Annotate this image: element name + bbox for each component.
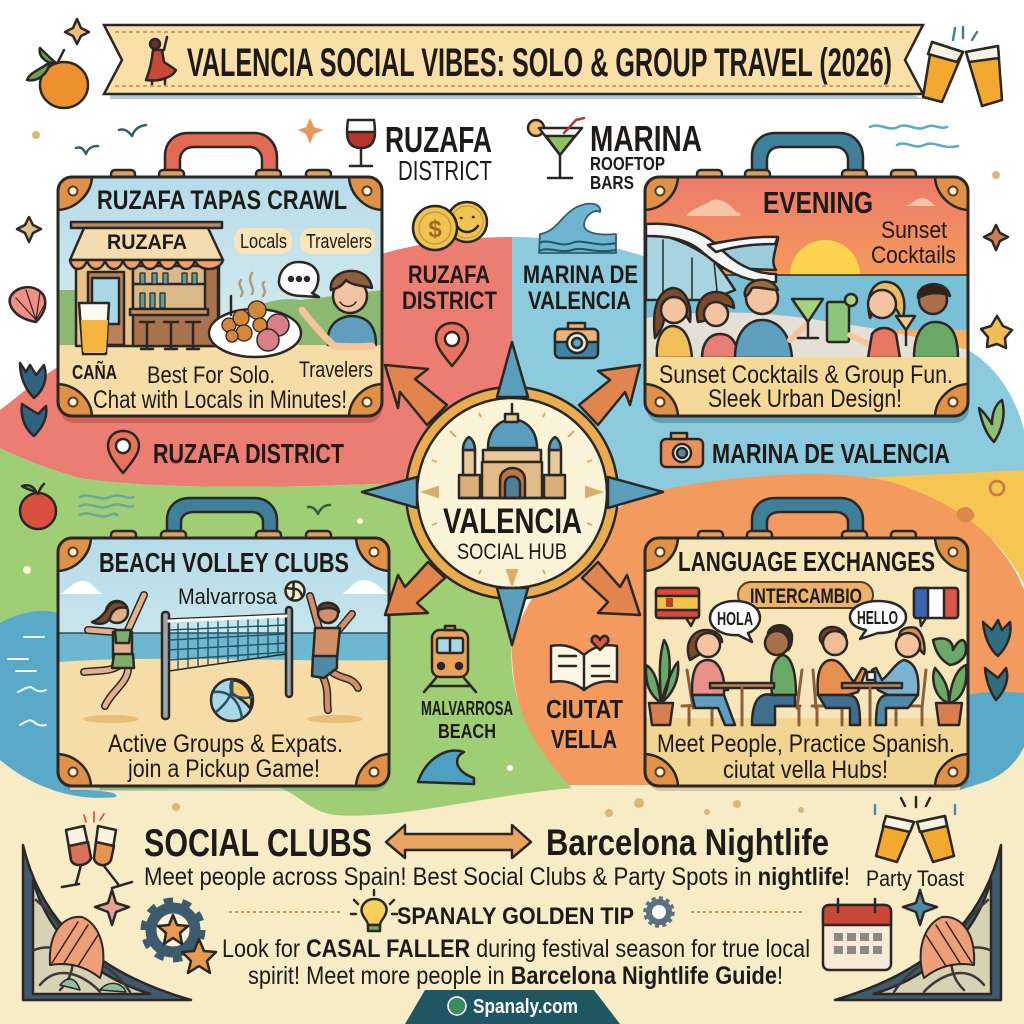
suitcase: Marina evening: Sleek Urban Design! bbox=[708, 385, 902, 413]
heading: golden tip: SPANALY GOLDEN TIP bbox=[397, 903, 634, 930]
suitcase: Ruzafa tapas crawl bbox=[58, 133, 382, 423]
footer badge: Spanaly.com bbox=[473, 996, 578, 1018]
icon: wine glass bbox=[347, 120, 375, 166]
label: Malvarrosa Beach: MALVARROSA bbox=[421, 698, 513, 720]
group of people bbox=[654, 280, 958, 358]
sand strip bbox=[646, 357, 967, 415]
label: Ruzafa District map: RUZAFA bbox=[408, 261, 490, 289]
suitcase: Ruzafa tapas crawl: Chat with Locals in Minutes! bbox=[93, 386, 347, 414]
glass of beer bbox=[79, 303, 109, 354]
handle bbox=[165, 133, 277, 172]
handle bbox=[752, 133, 863, 172]
decorations: birds and waves bbox=[76, 125, 958, 516]
corner ornament right bbox=[835, 845, 1001, 1000]
icon: seashell bbox=[10, 287, 46, 322]
icon: small wave bbox=[418, 750, 474, 784]
suitcase: Beach volley clubs: join a Pickup Game! bbox=[127, 755, 320, 783]
label: Ruzafa top: DISTRICT bbox=[398, 155, 492, 186]
corner brackets bbox=[58, 177, 382, 416]
suitcase: Beach volley clubs bbox=[58, 498, 389, 791]
icon: apple bbox=[20, 484, 56, 529]
suitcase: Ruzafa tapas crawl: Locals bbox=[240, 231, 287, 253]
icon: beer toast bottom bbox=[875, 797, 955, 862]
handle bbox=[752, 498, 863, 534]
label: Ruzafa District map: DISTRICT bbox=[402, 287, 497, 315]
suitcase: Beach volley clubs: Malvarrosa bbox=[178, 584, 278, 609]
clasps bbox=[697, 170, 916, 179]
title banner bbox=[104, 25, 926, 99]
suitcase: Ruzafa tapas crawl: RUZAFA bbox=[107, 231, 187, 254]
suitcase: Marina evening bbox=[645, 133, 969, 423]
icon: beer toast bbox=[923, 27, 1002, 106]
card text: BEACH VOLLEY CLUBS bbox=[99, 547, 349, 578]
clouds bbox=[686, 198, 936, 216]
icon: brown sparkle bbox=[984, 225, 1008, 250]
icon: teal sparkle bbox=[903, 890, 937, 925]
clasps bbox=[111, 531, 331, 540]
handle bbox=[167, 498, 277, 534]
icon: wine toast bbox=[62, 812, 132, 888]
compass hub: SOCIAL HUB bbox=[457, 539, 567, 564]
icon: ripples left sea bbox=[8, 637, 46, 726]
label: Marina de Valencia row bbox=[661, 433, 950, 469]
label: Ruzafa District row bbox=[108, 431, 344, 473]
player right bbox=[310, 596, 358, 710]
speech bubble bbox=[279, 262, 319, 297]
traveler bbox=[328, 316, 376, 345]
hub text: VALENCIA bbox=[443, 502, 582, 541]
clasps bbox=[111, 170, 331, 179]
icon: gear with star bbox=[144, 901, 216, 973]
steam bbox=[240, 273, 265, 296]
bar scene bbox=[70, 222, 376, 357]
icon: row pin bbox=[108, 431, 139, 473]
volleyball bbox=[211, 679, 253, 721]
label: Ruzafa District map bbox=[402, 261, 497, 315]
bottom section: spirit! Meet more people in Barcelona Nightlife Guide! bbox=[248, 962, 783, 990]
plant left bbox=[646, 640, 678, 725]
icon: plants right bbox=[983, 620, 1010, 700]
corner brackets bbox=[645, 538, 968, 786]
tip text: Look for CASAL FALLER during festival season for true local bbox=[222, 935, 810, 963]
icon: cathedral bbox=[459, 404, 565, 498]
compass star bbox=[362, 342, 663, 645]
label: Ruzafa top bbox=[347, 119, 492, 186]
suitcase: Language exchanges: Meet People, Practice Spanish. bbox=[657, 730, 955, 758]
flag: Spain bbox=[656, 588, 699, 626]
double arrow bbox=[386, 825, 531, 858]
icon: right ring bbox=[990, 481, 1004, 495]
clasps bbox=[698, 531, 916, 540]
icon: orange bbox=[27, 48, 88, 108]
scattered dots bbox=[23, 131, 1000, 817]
suitcase: Beach volley clubs: Active Groups & Expats. bbox=[108, 730, 343, 758]
suitcase: Language exchanges: INTERCAMBIO bbox=[750, 585, 862, 608]
icon: map pin bbox=[436, 323, 468, 366]
label: Marina de Valencia map bbox=[523, 261, 638, 315]
card text: RUZAFA TAPAS CRAWL bbox=[97, 185, 347, 215]
map region: Malvarrosa green bbox=[0, 448, 572, 816]
map region: Ciutat Vella orange bbox=[512, 474, 1024, 785]
card text: LANGUAGE EXCHANGES bbox=[678, 546, 935, 577]
suitcase: Language exchanges bbox=[645, 498, 969, 791]
compass ticks bbox=[423, 413, 601, 585]
label: Ruzafa District row: RUZAFA DISTRICT bbox=[153, 438, 344, 469]
label: Malvarrosa Beach: BEACH bbox=[438, 721, 496, 743]
corner brackets bbox=[58, 538, 389, 786]
label: Marina rooftop bars: BARS bbox=[590, 173, 634, 193]
plant right bbox=[933, 638, 966, 725]
marina building bbox=[646, 224, 778, 300]
tip divider lines bbox=[229, 911, 803, 913]
label: party toast: Party Toast bbox=[866, 866, 964, 891]
icon: martini bbox=[528, 118, 584, 178]
subheading line: Meet people across Spain! Best Social Clubs & Party Spots in nightlife! bbox=[144, 863, 850, 891]
deck bbox=[646, 312, 967, 358]
dollar sign: $ bbox=[428, 216, 442, 243]
suitcase: Ruzafa tapas crawl: Travelers bbox=[306, 231, 372, 253]
footer badge bbox=[405, 990, 620, 1024]
label: Malvarrosa Beach bbox=[421, 698, 513, 743]
toothpick bbox=[230, 296, 232, 315]
icon: coins bbox=[413, 202, 487, 250]
suitcase: Ruzafa tapas crawl: CAÑA bbox=[72, 361, 117, 384]
suitcase: Language exchanges: ciutat vella Hubs! bbox=[723, 756, 888, 784]
suitcase: Marina evening: Cocktails bbox=[871, 242, 956, 269]
label: Marina rooftop bars: ROOFTOP bbox=[590, 154, 665, 174]
label: Marina de Valencia map: MARINA DE bbox=[523, 261, 638, 289]
suitcase: Language exchanges: HELLO bbox=[857, 608, 898, 628]
suitcase: Ruzafa tapas crawl: Best For Solo. bbox=[147, 362, 275, 389]
suitcase: Marina evening: Sunset Cocktails & Group Fun. bbox=[659, 361, 953, 389]
map region: Ruzafa red bbox=[0, 237, 512, 495]
icon: wave bbox=[539, 204, 616, 253]
icon: small gear bbox=[645, 898, 673, 926]
speech bubbles bbox=[710, 601, 906, 642]
label: Marina de Valencia row: MARINA DE VALENCIA bbox=[712, 438, 950, 469]
icon: tan sparkle bbox=[17, 217, 41, 242]
label: Ciutat Vella: CIUTAT bbox=[546, 694, 623, 724]
volleyball net bbox=[162, 607, 292, 719]
suitcase: Marina evening: Sunset bbox=[881, 217, 947, 244]
heading: Barcelona Nightlife: Barcelona Nightlife bbox=[546, 822, 829, 863]
bottom section bbox=[23, 797, 1001, 1024]
sand shadows bbox=[83, 715, 363, 723]
label: Ciutat Vella: VELLA bbox=[551, 724, 617, 754]
heading: Social Clubs: SOCIAL CLUBS bbox=[144, 822, 372, 865]
map region: right sea blue bbox=[960, 692, 1024, 790]
compass hub bbox=[362, 342, 663, 645]
icon: dancer bbox=[146, 37, 176, 84]
sun bbox=[790, 240, 860, 275]
label: Ruzafa top: RUZAFA bbox=[385, 119, 492, 160]
icon: light bulb bbox=[351, 890, 397, 931]
icon: brown blob bbox=[957, 507, 974, 522]
icon: leaves left bbox=[20, 363, 46, 436]
table groups bbox=[682, 625, 926, 725]
icon: train bbox=[424, 626, 476, 692]
plate of tapas bbox=[209, 309, 301, 357]
label: Ciutat Vella bbox=[546, 694, 623, 754]
icon: pink sparkle bbox=[95, 890, 129, 925]
map region: left sea blue bbox=[0, 611, 117, 798]
icon: orange sparkle bbox=[298, 118, 324, 144]
map region: yellow accent bbox=[860, 470, 1024, 585]
player left bbox=[84, 595, 144, 706]
suitcase: Ruzafa tapas crawl: Travelers bbox=[299, 357, 373, 382]
pills bbox=[234, 228, 292, 254]
flag: France bbox=[914, 588, 958, 626]
map region: Marina blue bbox=[512, 237, 1024, 500]
icon: yellow star bbox=[981, 316, 1012, 348]
arrows bbox=[385, 365, 640, 615]
card text: EVENING bbox=[763, 185, 873, 220]
icon: leaves right bbox=[979, 400, 1004, 442]
icon: row camera bbox=[661, 433, 703, 467]
icon: camera bbox=[555, 323, 598, 358]
corner ornament left bbox=[23, 845, 191, 1000]
pill: Intercambio bbox=[738, 582, 873, 608]
clouds bbox=[60, 580, 388, 594]
label: Marina rooftop bars bbox=[528, 118, 702, 193]
icon: open book bbox=[551, 636, 617, 690]
ring bbox=[406, 387, 618, 599]
label: Marina de Valencia map: VALENCIA bbox=[528, 287, 631, 315]
icon: calendar bbox=[823, 899, 891, 970]
corner brackets bbox=[645, 177, 968, 416]
small ball bbox=[286, 582, 304, 600]
suitcase: Language exchanges: HOLA bbox=[717, 609, 753, 629]
icon: sparkle bbox=[65, 19, 89, 44]
label: Marina rooftop bars: MARINA bbox=[590, 118, 702, 159]
sea bbox=[646, 275, 967, 330]
